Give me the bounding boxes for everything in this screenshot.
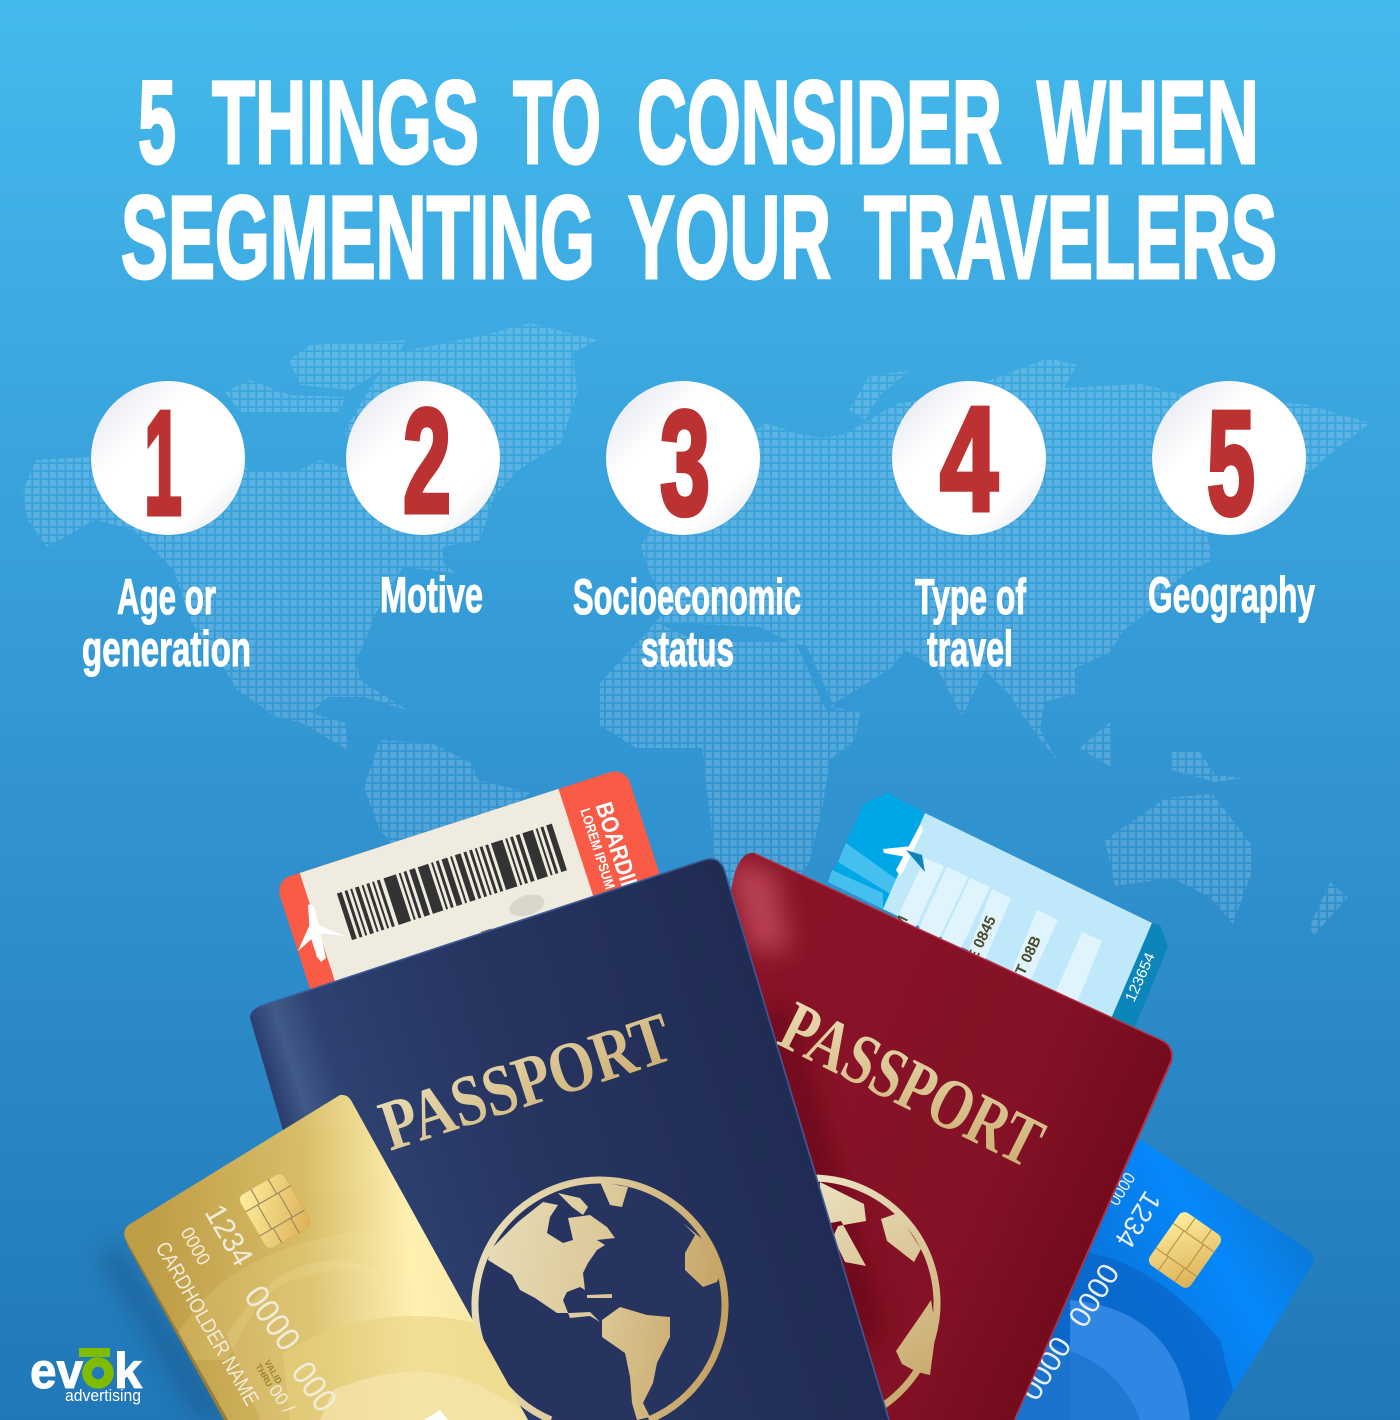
- item 3: socioeconomic status: 3: [660, 381, 710, 546]
- card numbers: 0000: [1013, 1330, 1077, 1405]
- card numbers: 0000: [1061, 1257, 1125, 1332]
- ticket text: M: [891, 913, 912, 932]
- title: [121, 57, 1277, 304]
- title: YOUR: [628, 172, 831, 304]
- chip: [1146, 1209, 1224, 1291]
- title: TO: [513, 57, 601, 189]
- item 2: motive: [346, 379, 500, 623]
- card numbers: 0000: [1104, 1169, 1139, 1209]
- item 3: socioeconomic status: [573, 381, 801, 677]
- card text: 00 /: [265, 1381, 298, 1417]
- airline ticket: E 0845: [964, 913, 1000, 964]
- card text: 0000: [176, 1224, 214, 1269]
- boarding pass: [275, 767, 712, 1147]
- passport label: PASSPORT: [370, 997, 681, 1166]
- faded map mark: [507, 890, 547, 920]
- item 2: motive: 2: [403, 379, 451, 544]
- title: WHEN: [1037, 57, 1259, 189]
- globe: [475, 1180, 725, 1420]
- red passport: [687, 853, 1173, 1420]
- airline ticket: [828, 793, 1168, 1029]
- item 3: socioeconomic status: status: [641, 621, 734, 677]
- blue credit card: [1015, 1138, 1314, 1420]
- airline ticket: 123654: [1122, 950, 1159, 1005]
- card text: 1234: [198, 1199, 259, 1272]
- card numbers: [1013, 1169, 1167, 1405]
- title: THINGS: [212, 57, 479, 189]
- passport label: PASSPORT: [768, 986, 1056, 1183]
- globe: [687, 1178, 937, 1420]
- navy passport: [250, 859, 889, 1420]
- item 1: age or generation: 1: [144, 381, 182, 546]
- item 1: age or generation: Age or: [117, 569, 216, 625]
- barcode: [337, 824, 567, 940]
- item 4: type of travel: travel: [927, 621, 1013, 677]
- lorem ipsum text: LOREM IPSUM: [577, 806, 618, 891]
- gold credit card: [100, 1095, 560, 1420]
- logo: evok advertising: advertising: [65, 1386, 141, 1405]
- title: 5: [138, 57, 176, 189]
- card text: 0000: [236, 1279, 308, 1358]
- boarding text: BOARDING: [590, 799, 650, 914]
- logo: evok advertising: k: [114, 1343, 142, 1399]
- chip: [237, 1171, 313, 1251]
- card text: THRU: [253, 1362, 274, 1389]
- dotted world map: [0, 320, 1400, 960]
- card text: [151, 1199, 344, 1419]
- item 3: socioeconomic status: Socioeconomic: [573, 569, 801, 625]
- logo: evok advertising: ev: [30, 1343, 83, 1399]
- title: SEGMENTING: [121, 172, 595, 304]
- title: CONSIDER: [637, 57, 1002, 189]
- item 2: motive: Motive: [380, 567, 483, 623]
- item 5: geography: 5: [1207, 381, 1255, 546]
- icon: blue ticket plane: [883, 825, 925, 876]
- card numbers: 1234: [1109, 1186, 1167, 1253]
- item 5: geography: [1148, 381, 1315, 623]
- item 1: age or generation: [82, 381, 251, 677]
- icon: red ticket plane: [298, 905, 345, 962]
- item 4: type of travel: [892, 377, 1046, 677]
- card text: VALID: [262, 1358, 284, 1386]
- logo: evok advertising: [30, 1343, 142, 1405]
- item 4: type of travel: Type of: [915, 569, 1026, 625]
- item 1: age or generation: generation: [82, 621, 251, 677]
- item 4: type of travel: 4: [940, 377, 998, 542]
- airline ticket: T 08B: [1012, 933, 1045, 978]
